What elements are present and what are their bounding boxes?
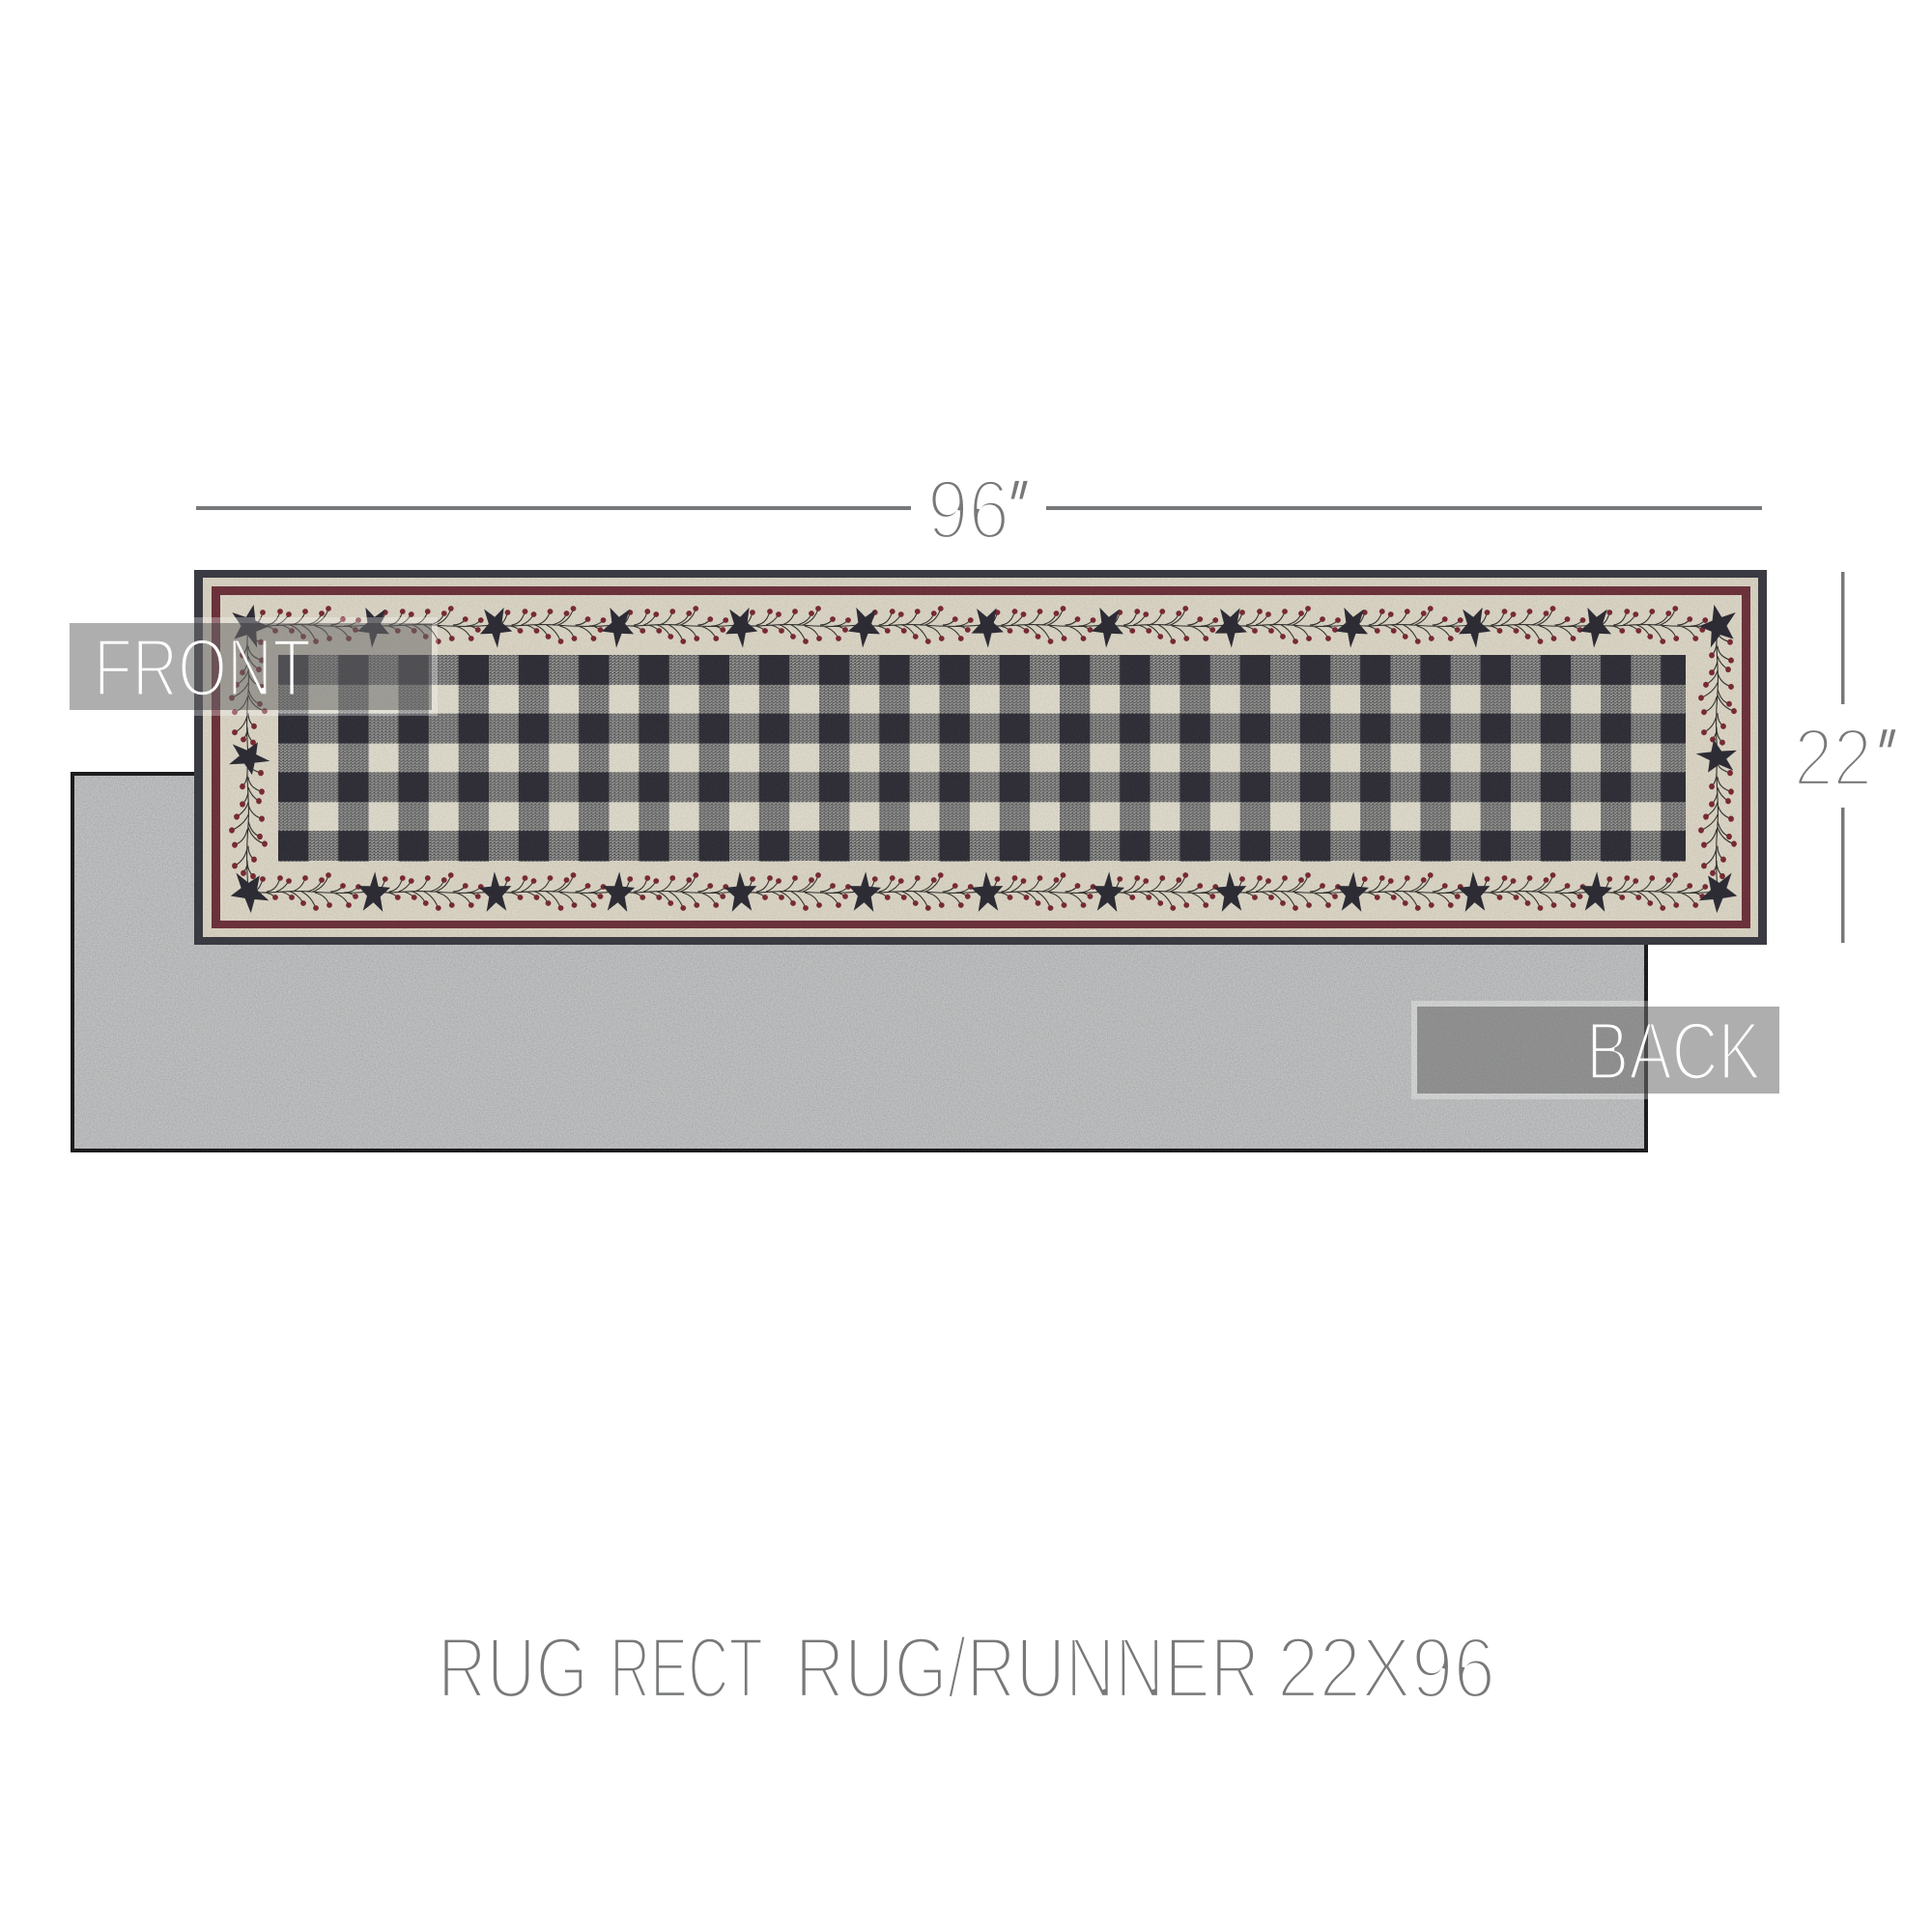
title: 22X96 bbox=[1277, 1619, 1495, 1716]
back label bbox=[1411, 1001, 1779, 1099]
width dimension: 96 inches: " bbox=[994, 463, 1034, 556]
rug texture bbox=[203, 578, 1758, 937]
buffalo check centre bbox=[278, 655, 1686, 862]
bottom vine border bbox=[249, 872, 1718, 911]
title: RUG bbox=[438, 1619, 588, 1716]
dark outer binding bbox=[194, 570, 1767, 945]
title: RUG/RUNNER bbox=[795, 1619, 1260, 1716]
height dimension: 22 inches: " bbox=[1862, 713, 1902, 804]
front label bbox=[70, 617, 438, 716]
right vine border bbox=[1698, 628, 1737, 890]
height dimension: 22 inches bbox=[1794, 572, 1902, 943]
width dimension: 96 inches bbox=[196, 463, 1762, 556]
front of rug bbox=[194, 570, 1767, 945]
left vine border bbox=[229, 628, 268, 890]
title bbox=[438, 1619, 1495, 1716]
width dimension: 96 inches: 96 bbox=[927, 464, 1009, 556]
inner cream field bbox=[220, 595, 1742, 921]
title: RECT bbox=[610, 1619, 763, 1716]
top vine border bbox=[249, 606, 1718, 644]
back of rug bbox=[71, 772, 1648, 1152]
top row of stars bbox=[225, 602, 1743, 654]
bottom row of stars bbox=[221, 863, 1747, 917]
burgundy stripe bbox=[212, 586, 1750, 928]
height dimension: 22 inches: 22 bbox=[1794, 712, 1872, 803]
left and right side stars bbox=[228, 737, 1738, 778]
outer cream band bbox=[203, 578, 1758, 937]
